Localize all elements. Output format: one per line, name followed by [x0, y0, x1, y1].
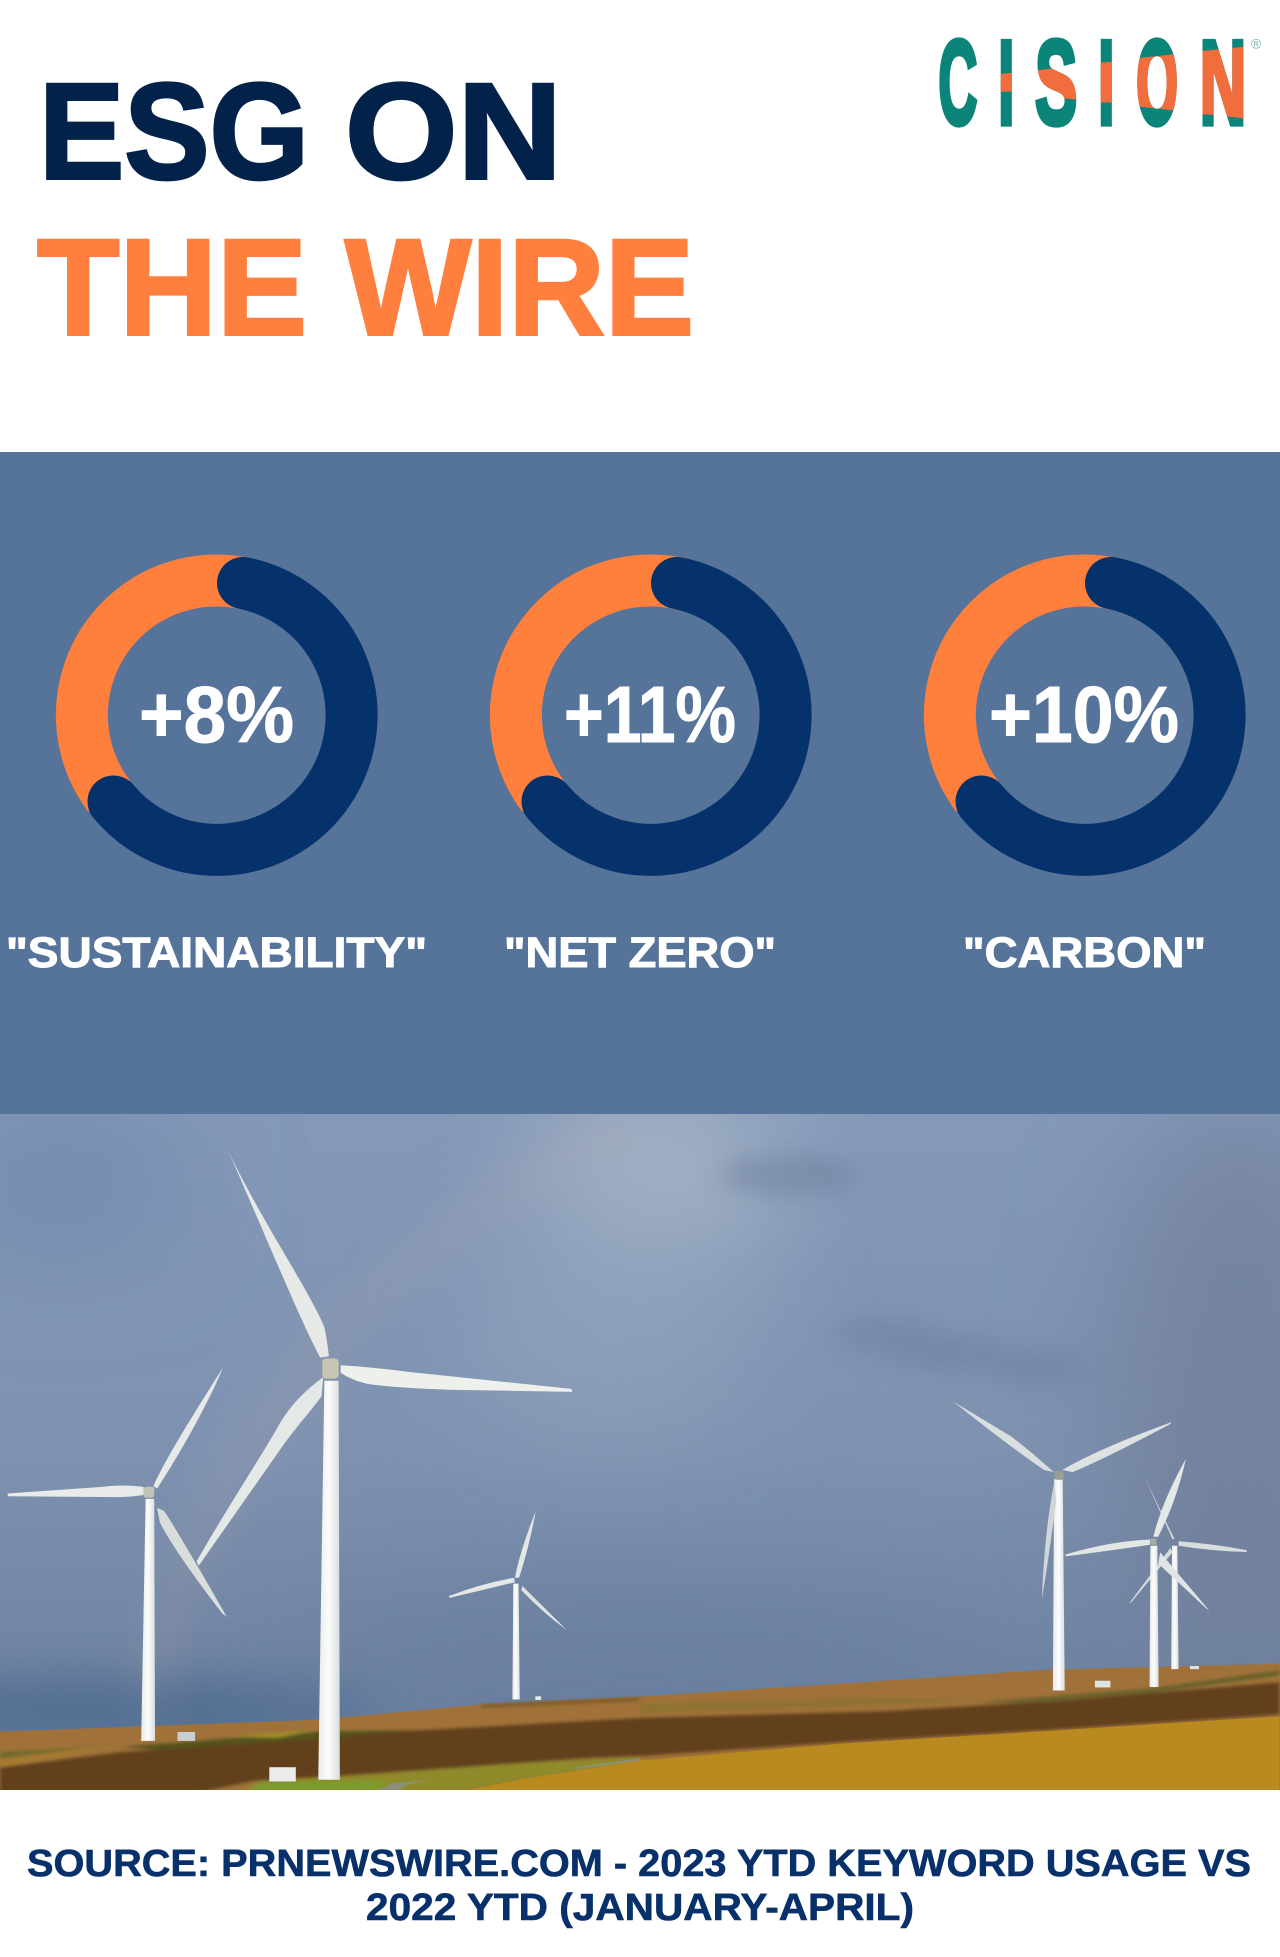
- title line: THE WIRE: WIRE: [345, 212, 694, 364]
- turbine: middle: [1065, 1459, 1209, 1687]
- donut: sustainability: +8%: [139, 670, 294, 759]
- title line: ESG ON: ESG: [39, 56, 309, 208]
- turbines: left group: [7, 1151, 572, 1781]
- buildings: [1095, 1666, 1199, 1687]
- title line: ESG ON: ON: [345, 56, 562, 208]
- title: [37, 56, 694, 364]
- rainbow: [155, 1636, 168, 1680]
- panel: keyword growth: [0, 452, 1280, 1114]
- logo: Cision: O: [1136, 17, 1178, 150]
- label: sustainability: "SUSTAINABILITY": [6, 929, 427, 977]
- turbines: right group: [954, 1402, 1247, 1691]
- source note: 2022 YTD (JANUARY-APRIL): [366, 1887, 914, 1929]
- logo: Cision: ®: [1251, 36, 1262, 52]
- ground: [0, 1664, 1279, 1800]
- buildings: [177, 1696, 541, 1781]
- logo: Cision: S: [1035, 17, 1077, 150]
- logo: Cision: C: [938, 17, 977, 150]
- turbine: left: [7, 1367, 227, 1741]
- donut: net zero: [516, 580, 786, 850]
- logo: Cision: I: [998, 17, 1014, 150]
- source note: SOURCE: PRNEWSWIRE.COM - 2023 YTD KEYWORD USAGE VS: [27, 1843, 1251, 1885]
- logo: Cision: I: [1098, 17, 1114, 150]
- label: net zero: "NET ZERO": [504, 929, 776, 977]
- photo: wind turbines: [0, 1080, 1280, 1800]
- title line: ESG ON: [39, 56, 562, 208]
- donut: net zero: +11%: [564, 670, 736, 759]
- donut: sustainability: [82, 580, 352, 850]
- turbine: far small: [449, 1511, 567, 1699]
- logo: Cision: S: [1035, 17, 1077, 150]
- title line: THE WIRE: THE: [37, 212, 307, 364]
- label: carbon: "CARBON": [963, 929, 1206, 977]
- logo: Cision: [939, 37, 1262, 128]
- turbine: large foreground: [197, 1151, 572, 1780]
- logo: Cision: I: [998, 17, 1014, 150]
- clouds: [720, 1155, 1085, 1384]
- donut: carbon: +10%: [989, 670, 1179, 759]
- source note: [27, 1843, 1251, 1929]
- donut: carbon: [950, 580, 1220, 850]
- logo: Cision: O: [1136, 17, 1178, 150]
- title line: THE WIRE: [37, 212, 694, 364]
- turbine: right front: [954, 1402, 1171, 1691]
- logo: Cision: I: [1098, 17, 1114, 150]
- turbine: back: [1130, 1476, 1247, 1669]
